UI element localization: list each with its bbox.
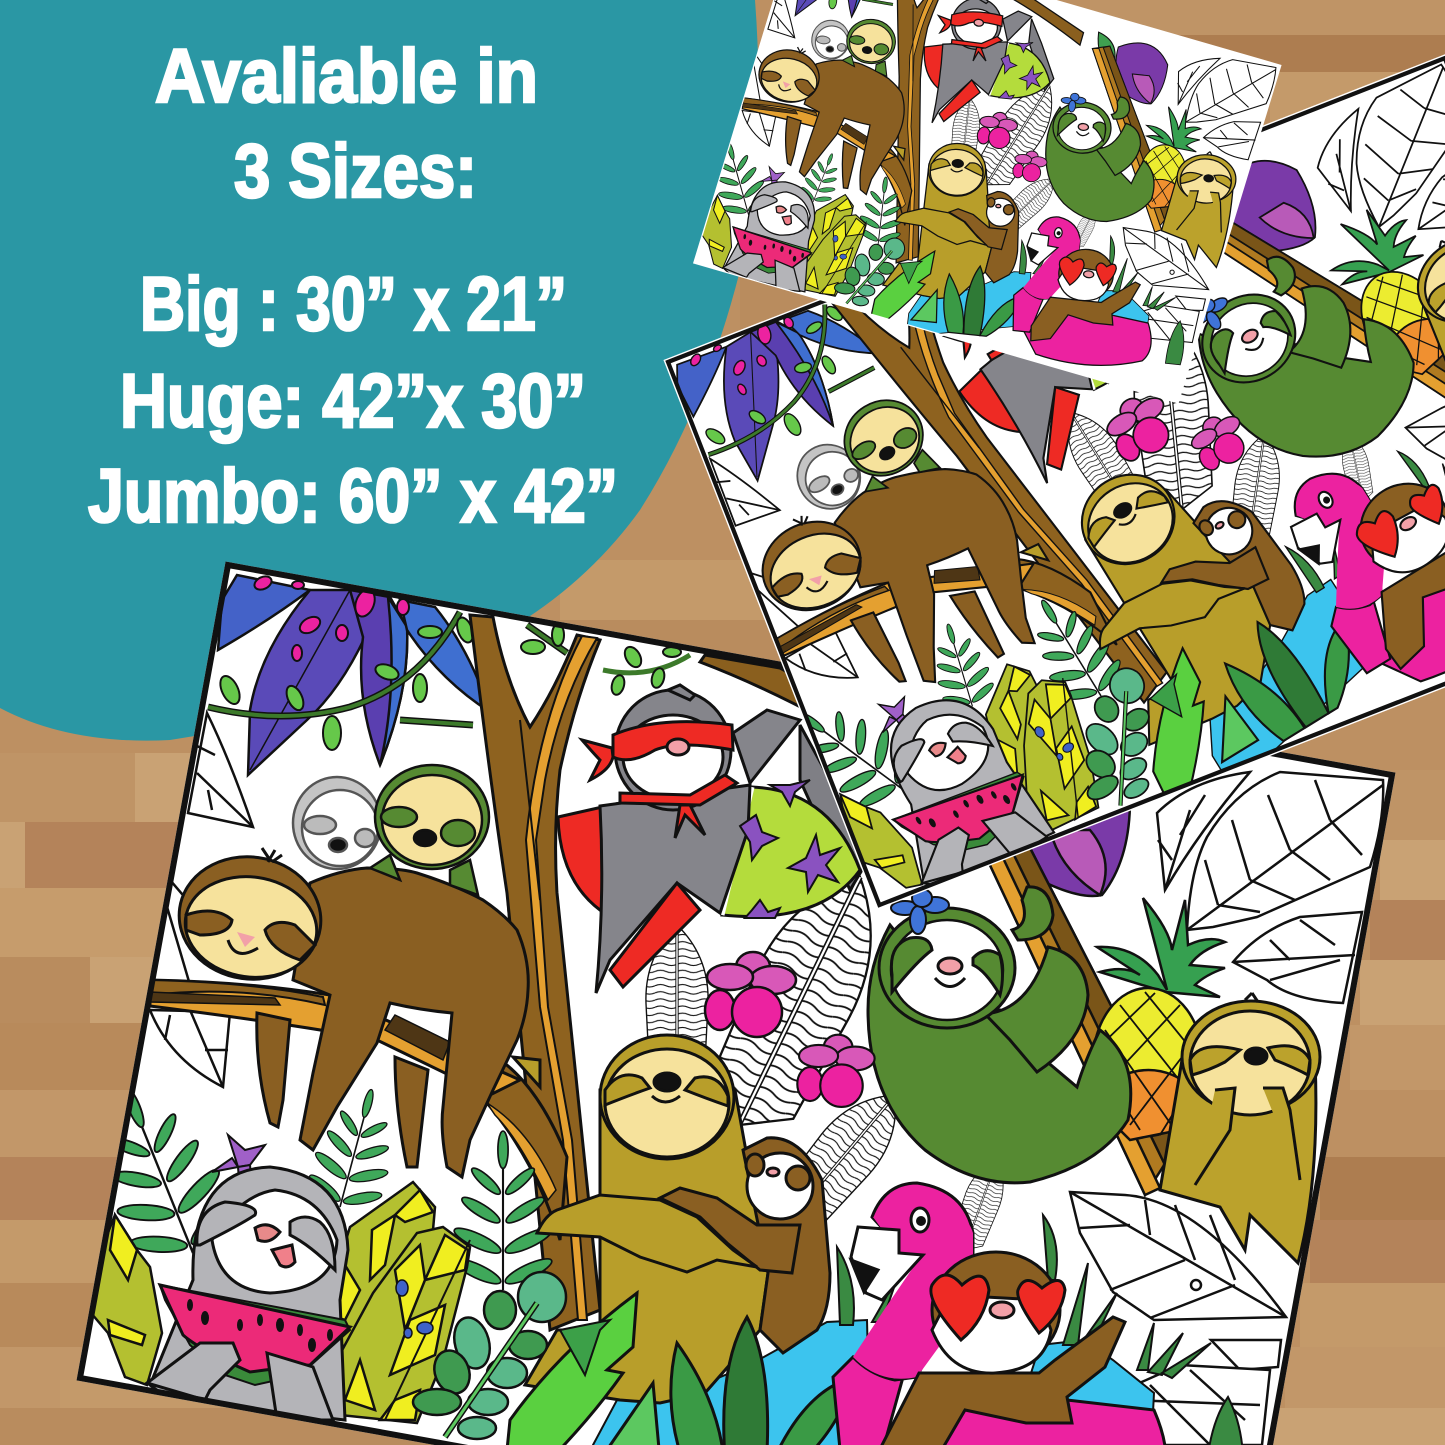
reeds [837,1215,1243,1445]
watermelon seeds [187,1299,333,1352]
green vines [208,612,567,725]
pink dots on leaves [252,574,409,661]
size list: Big : 30” x 21” [140,262,567,347]
purple flower [212,1135,265,1193]
striped fern leaves [646,854,1014,1256]
monstera leaf [960,740,1130,896]
green sloth hanging [868,887,1131,1183]
upper right branch [700,655,925,775]
white line leaves top right [1157,772,1383,1003]
size list [88,262,618,539]
sloth branch [150,980,520,1095]
purple stars [740,780,840,918]
heart-eyed sloth [882,1252,1125,1445]
flamingo [833,1183,973,1445]
blue purple leaves [218,575,490,775]
blue flower [891,889,949,934]
heading: available in 3 sizes [155,34,538,214]
heading: available in 3 sizes: 3 Sizes: [234,129,477,214]
grey sloth with watermelon [147,1167,350,1420]
pink ring float [860,1395,1166,1445]
main tree [470,615,600,1330]
poster: big size, bottom [76,562,1396,1445]
white leaf lower right [1070,1192,1286,1445]
yellow banana leaves [80,1182,470,1423]
teal blob panel [0,0,758,741]
olive sloth covering cheeks [1160,993,1320,1263]
pineapple [1093,898,1225,1140]
olive mother sloth [525,1035,830,1403]
lower tree branch [487,1057,567,1240]
size list: Jumbo: 60” x 42” [88,454,618,539]
white leaves left [150,713,253,1087]
poster: jumbo, small top [693,0,1282,403]
vine leaves [216,615,681,750]
poster: huge size, middle [664,54,1445,908]
ninja sloth [558,685,868,993]
grey baby sloth [293,777,381,869]
size list: Huge: 42”x 30” [120,359,586,444]
green ferns [73,1067,554,1290]
round-leaf plant [413,1272,566,1439]
water [593,1320,1154,1445]
heading: available in 3 sizes: Avaliable in [155,34,538,119]
foreground green leaves [505,1293,855,1445]
green baby sloth [370,765,489,895]
green sloth trunk [950,770,1180,1195]
hibiscus flowers [705,952,875,1107]
upper vine [603,655,690,673]
big brown sloth [171,848,528,1177]
